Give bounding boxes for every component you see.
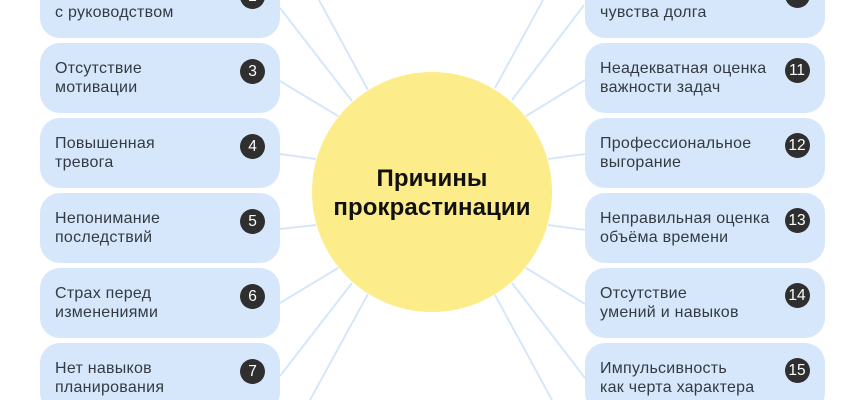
card 3: мотивации <box>55 78 137 96</box>
card 13: 13 <box>788 212 806 228</box>
card 5: 5 <box>248 212 257 230</box>
card 12 <box>585 118 825 188</box>
card 7 <box>40 343 280 400</box>
card 7: 7 <box>248 362 257 380</box>
card 11: Неадекватная оценка <box>600 60 766 76</box>
card 4: тревога <box>55 154 114 170</box>
card 6: изменениями <box>55 304 158 320</box>
card 13: объёма времени <box>600 228 728 246</box>
card 2: с руководством <box>55 4 174 20</box>
central title: прокрастинации <box>333 194 531 221</box>
card 4: Повышенная <box>55 134 155 152</box>
card 14 <box>585 268 825 338</box>
card 3: 3 <box>248 62 257 80</box>
card 11: 11 <box>789 62 805 78</box>
card 6 <box>40 268 280 338</box>
card 5: последствий <box>55 228 152 246</box>
card 3 <box>40 43 280 113</box>
card 15 <box>585 343 825 400</box>
card 12: 12 <box>788 136 806 154</box>
card 5: Непонимание <box>55 210 160 226</box>
card 13 <box>585 193 825 263</box>
card 2 <box>40 0 280 38</box>
central circle <box>312 72 552 312</box>
card 14: умений и навыков <box>600 304 739 320</box>
card 4 <box>40 118 280 188</box>
card 15: Импульсивность <box>600 360 727 376</box>
card 10 <box>585 0 825 38</box>
card 11 <box>585 43 825 113</box>
card 13: Неправильная оценка <box>600 210 770 226</box>
card 10: чувства долга <box>600 4 707 20</box>
card 14: 14 <box>788 286 806 304</box>
card 15: 15 <box>788 362 806 378</box>
card 5 <box>40 193 280 263</box>
card 7: Нет навыков <box>55 360 152 376</box>
card 4: 4 <box>248 138 257 154</box>
card 6: 6 <box>248 288 257 304</box>
card 14: Отсутствие <box>600 284 687 302</box>
central title: Причины <box>376 165 488 192</box>
card 12: Профессиональное <box>600 134 751 152</box>
card 6: Страх перед <box>55 284 151 302</box>
card 11: важности задач <box>600 78 720 96</box>
card 12: выгорание <box>600 154 681 170</box>
card 3: Отсутствие <box>55 60 142 76</box>
card 15: как черта характера <box>600 378 754 396</box>
card 7: планирования <box>55 378 164 396</box>
central title <box>333 165 531 221</box>
